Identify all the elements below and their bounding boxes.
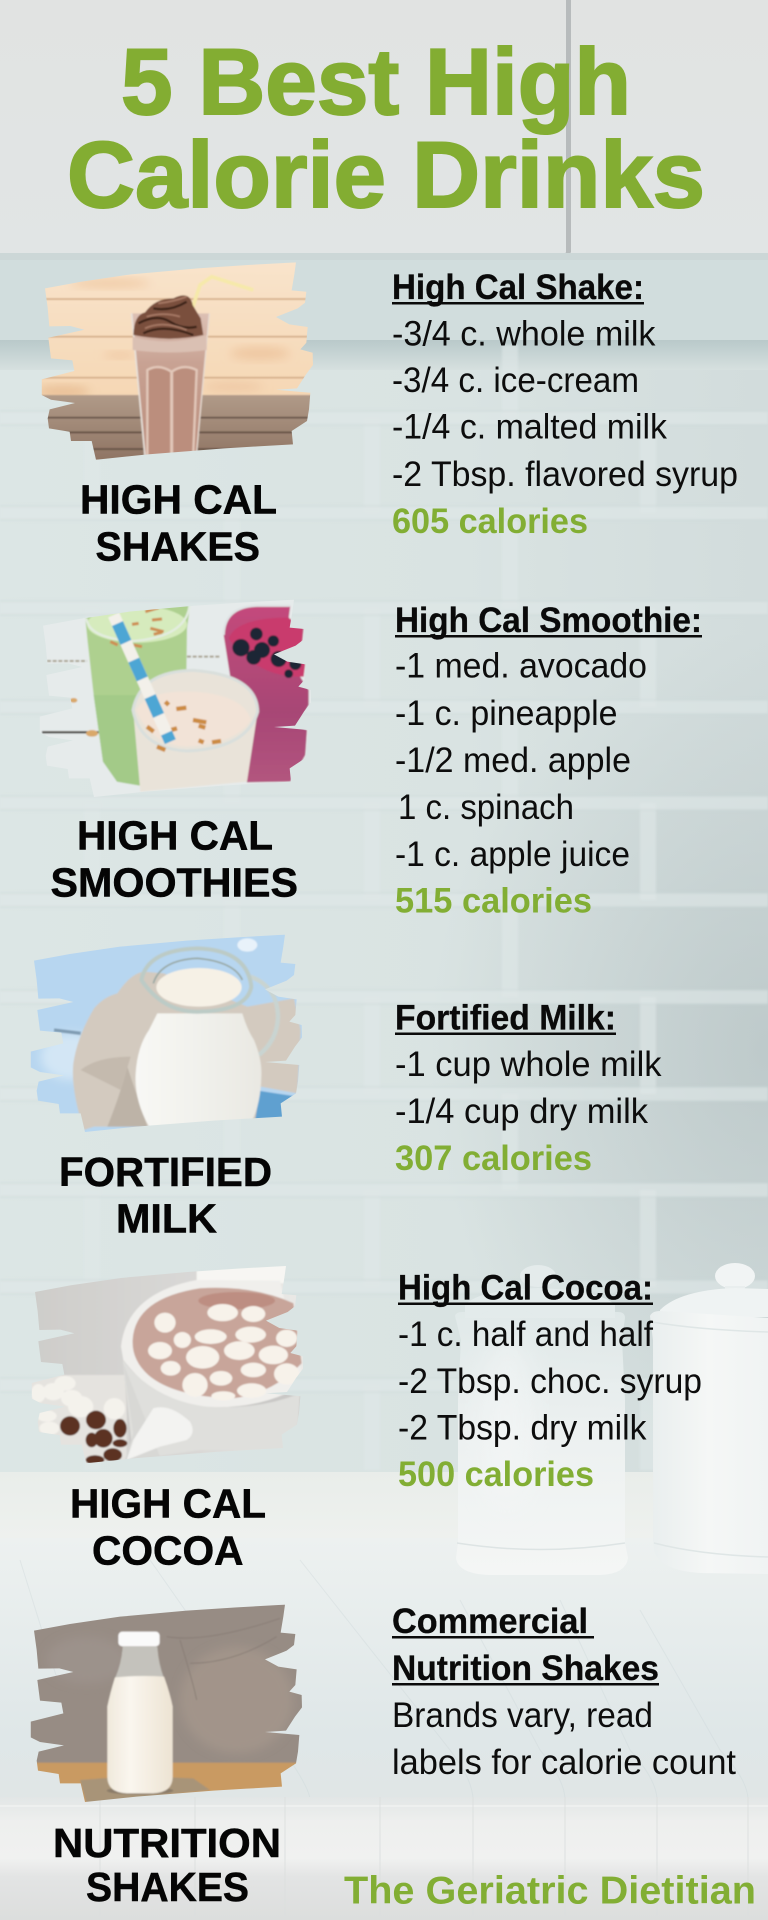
photo: cocoa mug bbox=[32, 1266, 303, 1463]
recipe: commercial nutrition shakes bbox=[392, 1602, 736, 1782]
label: high cal cocoa bbox=[70, 1480, 266, 1574]
recipe: high cal shake bbox=[392, 268, 738, 541]
panel: high cal shakes bbox=[30, 255, 738, 569]
recipe: fortified milk: Fortified Milk: bbox=[395, 998, 616, 1038]
recipe: fortified milk: -1/4 cup dry milk bbox=[395, 1092, 648, 1131]
panel: nutrition shakes bbox=[20, 1600, 736, 1910]
recipe: high cal smoothie: 515 calories bbox=[395, 882, 592, 920]
recipe: fortified milk: -1 cup whole milk bbox=[395, 1045, 662, 1084]
recipe: high cal shake: -2 Tbsp. flavored syrup bbox=[392, 455, 738, 494]
recipe: high cal shake: -3/4 c. ice-cream bbox=[392, 361, 639, 400]
recipe: commercial nutrition shakes: labels for calorie count bbox=[392, 1743, 736, 1782]
recipe: high cal cocoa: -2 Tbsp. choc. syrup bbox=[398, 1362, 702, 1401]
label: high cal smoothies: SMOOTHIES bbox=[50, 860, 298, 906]
photo: chocolate milkshake bbox=[42, 262, 313, 460]
label: high cal shakes: SHAKES bbox=[96, 524, 260, 570]
label: nutrition shakes bbox=[53, 1820, 281, 1910]
label: high cal smoothies bbox=[50, 812, 298, 906]
label: high cal shakes bbox=[80, 476, 277, 570]
recipe: high cal smoothie: 1 c. spinach bbox=[398, 788, 574, 827]
recipe: high cal shake: -1/4 c. malted milk bbox=[392, 408, 667, 446]
recipe: high cal cocoa: -1 c. half and half bbox=[398, 1315, 653, 1354]
recipe: high cal smoothie: -1/2 med. apple bbox=[395, 741, 631, 780]
jars on the counter bbox=[455, 1263, 768, 1575]
panel: high cal smoothies bbox=[30, 595, 702, 920]
recipe: high cal cocoa: High Cal Cocoa: bbox=[398, 1268, 653, 1308]
panel: high cal cocoa bbox=[20, 1260, 702, 1574]
recipe: high cal smoothie bbox=[395, 601, 702, 920]
recipe: high cal smoothie: -1 c. pineapple bbox=[395, 694, 618, 733]
recipe: high cal smoothie: -1 c. apple juice bbox=[395, 835, 630, 874]
panel: fortified milk bbox=[21, 930, 662, 1242]
recipe: fortified milk: 307 calories bbox=[395, 1139, 592, 1178]
label: high cal cocoa: COCOA bbox=[92, 1528, 244, 1574]
title: 5 Best High bbox=[121, 29, 631, 134]
footer: brand name: The Geriatric Dietitian bbox=[344, 1870, 756, 1912]
recipe: high cal shake: High Cal Shake: bbox=[392, 268, 644, 307]
label: high cal smoothies: HIGH CAL bbox=[77, 812, 273, 858]
label: fortified milk: MILK bbox=[116, 1196, 217, 1242]
label: high cal shakes: HIGH CAL bbox=[80, 476, 277, 522]
recipe: commercial nutrition shakes: Commercial bbox=[392, 1602, 588, 1641]
label: fortified milk: FORTIFIED bbox=[59, 1149, 272, 1195]
recipe: high cal cocoa bbox=[398, 1268, 702, 1494]
recipe: high cal shake: 605 calories bbox=[392, 502, 588, 541]
photo: milk bottle bbox=[30, 1604, 302, 1802]
recipe: high cal smoothie: High Cal Smoothie: bbox=[395, 601, 702, 640]
recipe: high cal cocoa: -2 Tbsp. dry milk bbox=[398, 1408, 647, 1448]
recipe: commercial nutrition shakes: Brands vary, read bbox=[392, 1696, 653, 1735]
label: high cal cocoa: HIGH CAL bbox=[70, 1480, 266, 1526]
title: Calorie Drinks bbox=[67, 122, 705, 227]
recipe: high cal cocoa: 500 calories bbox=[398, 1455, 594, 1494]
label: nutrition shakes: SHAKES bbox=[86, 1864, 249, 1910]
recipe: high cal shake: -3/4 c. whole milk bbox=[392, 314, 656, 354]
recipe: fortified milk bbox=[395, 998, 662, 1178]
label: fortified milk bbox=[59, 1149, 272, 1242]
recipe: commercial nutrition shakes: Nutrition Shakes bbox=[392, 1649, 659, 1688]
recipe: high cal smoothie: -1 med. avocado bbox=[395, 646, 647, 686]
photo: milk jug bbox=[30, 934, 302, 1132]
photo: three smoothies bbox=[40, 600, 311, 797]
label: nutrition shakes: NUTRITION bbox=[53, 1820, 281, 1866]
title bbox=[67, 29, 705, 227]
